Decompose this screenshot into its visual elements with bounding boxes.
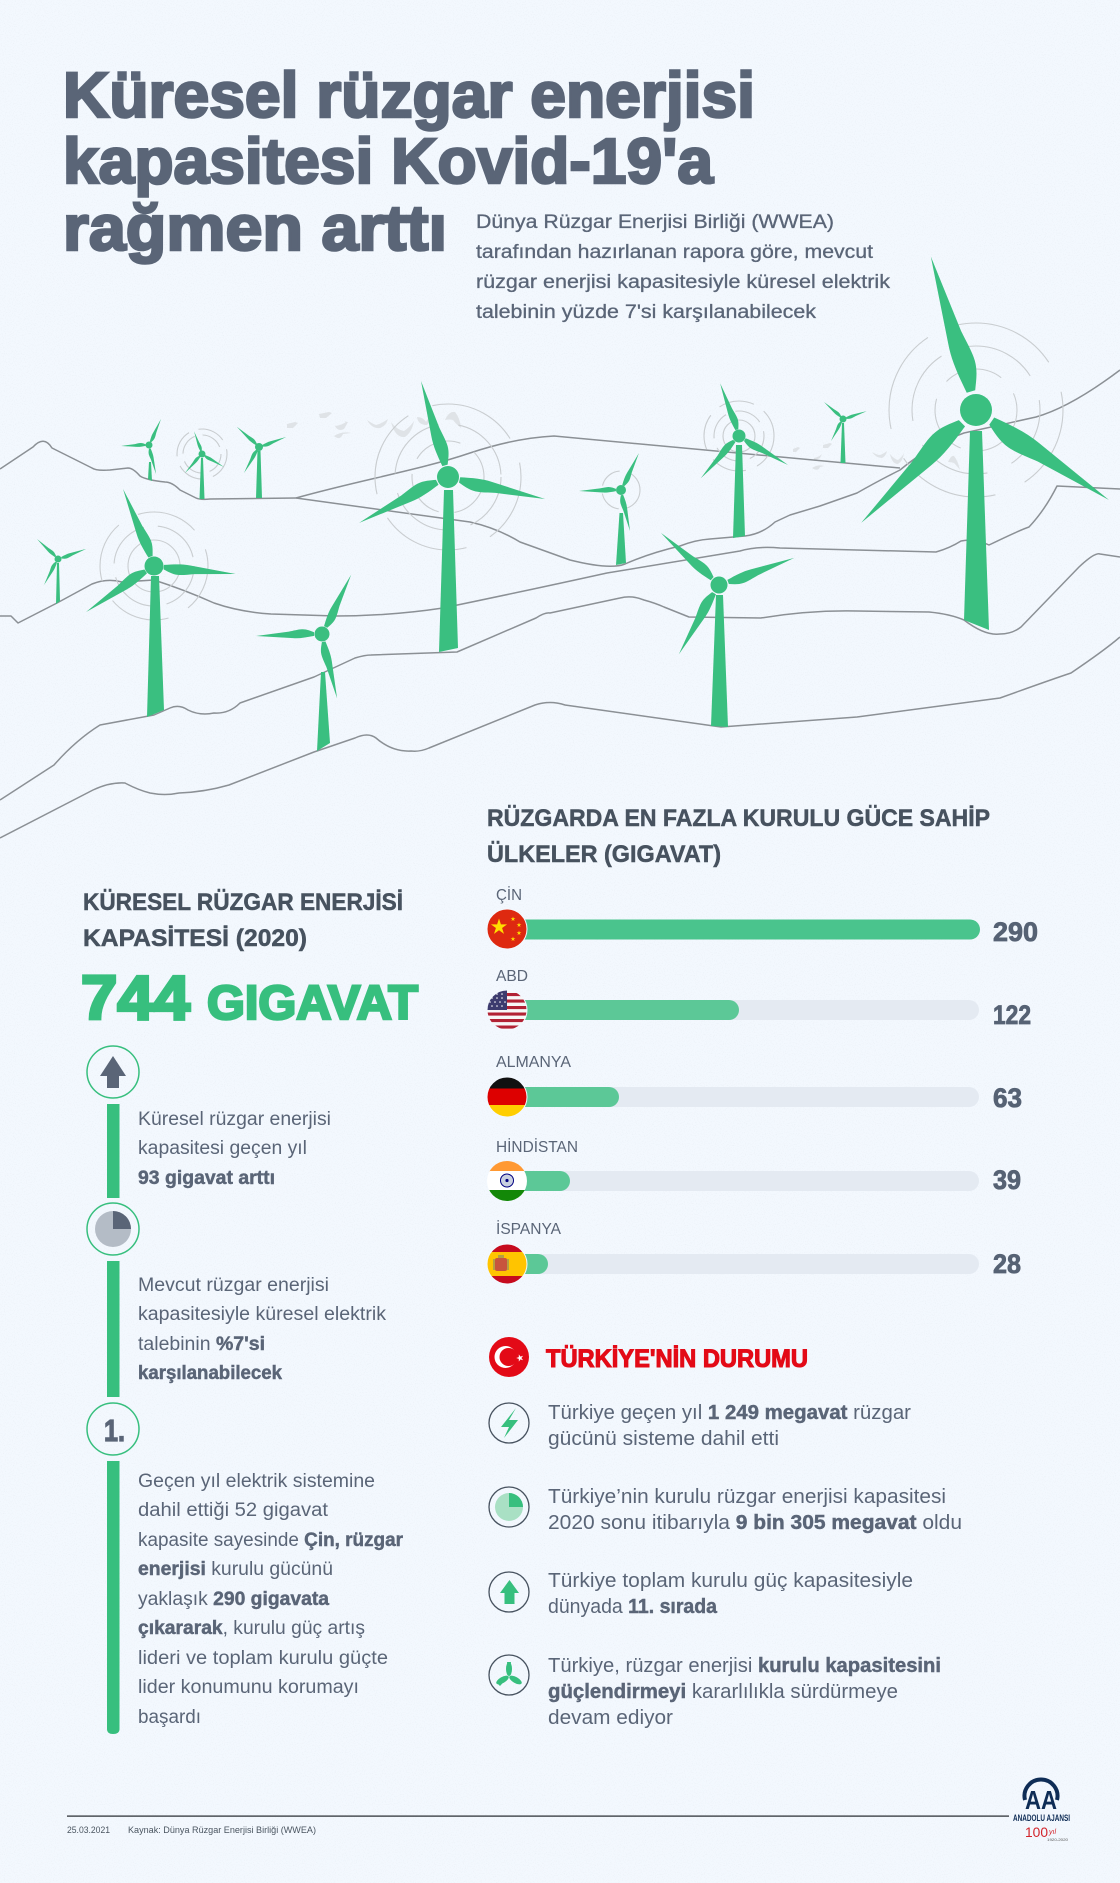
turbine far right small — [823, 400, 867, 463]
text: added capacity: Türkiye geçen yıl 1 249 megavat rüzgar — [548, 1402, 911, 1424]
text: China: çıkararak, kurulu güç artış — [138, 1618, 365, 1639]
text: China: Geçen yıl elektrik sistemine — [138, 1471, 375, 1492]
turbine left — [82, 487, 236, 717]
intro text: tarafından hazırlanan rapora göre, mevcut — [476, 241, 874, 263]
logo: Anadolu Ajansi: AA — [1025, 1785, 1057, 1815]
logo: Anadolu Ajansi: 100 — [1025, 1824, 1048, 1840]
text: China: kapasite sayesinde Çin, rüzgar — [138, 1530, 404, 1551]
turbine far small 1 — [236, 425, 287, 498]
text: growth: kapasitesi geçen yıl — [138, 1138, 307, 1159]
row: Spain: 28 — [993, 1249, 1021, 1279]
heading: top countries — [487, 805, 990, 868]
text: world ranking: dünyada 11. sırada — [548, 1596, 718, 1618]
row: India: 39 — [993, 1165, 1021, 1195]
text: added capacity: gücünü sisteme dahil etti — [548, 1428, 779, 1450]
panel: top countries chart — [487, 805, 1038, 1284]
row: Germany: ALMANYA — [496, 1054, 571, 1071]
illustration: wind farm landscape — [0, 253, 1120, 838]
row: Germany — [487, 1054, 1022, 1118]
text: China: başardı — [138, 1707, 201, 1728]
icon: lightning — [489, 1403, 529, 1443]
text: installed capacity: Türkiye’nin kurulu rüzgar enerjisi kapasitesi — [548, 1486, 946, 1508]
turbine large right — [852, 253, 1114, 630]
row: USA: 122 — [993, 1000, 1031, 1030]
icon: turbine rotor — [489, 1655, 529, 1695]
text: strengthening: devam ediyor — [548, 1707, 673, 1729]
text: demand share — [138, 1275, 387, 1384]
text: demand share: karşılanabilecek — [138, 1363, 282, 1384]
heading: Turkey: TÜRKİYE'NİN DURUMU — [546, 1344, 808, 1373]
row: China: ÇİN — [496, 885, 522, 904]
turbine lower centre — [658, 528, 796, 727]
icon: number one: 1. — [104, 1413, 125, 1448]
heading: global capacity: KÜRESEL RÜZGAR ENERJİSİ — [83, 889, 403, 916]
text: demand share: talebinin %7'si — [138, 1334, 265, 1355]
timeline bar 1 — [107, 1104, 120, 1198]
title: rağmen arttı — [63, 192, 447, 264]
icon: green pie — [489, 1487, 529, 1527]
text: China: lideri ve toplam kurulu güçte — [138, 1648, 388, 1669]
intro text: rüzgar enerjisi kapasitesiyle küresel elektrik — [476, 271, 890, 293]
text: demand share: kapasitesiyle küresel elektrik — [138, 1304, 387, 1325]
title: Küresel rüzgar enerjisi — [63, 59, 755, 131]
heading: top countries: ÜLKELER (GIGAVAT) — [487, 841, 721, 868]
heading: top countries: RÜZGARDA EN FAZLA KURULU GÜCE SAHİP — [487, 805, 990, 832]
text: strengthening: güçlendirmeyi kararlılıkla sürdürmeye — [548, 1681, 898, 1703]
footer date: 25.03.2021 — [67, 1825, 110, 1835]
turbine centre — [355, 379, 546, 652]
text: world ranking: Türkiye toplam kurulu güç kapasitesiyle — [548, 1570, 913, 1592]
logo: Anadolu Ajansi: ANADOLU AJANSI — [1013, 1813, 1070, 1823]
row: USA: ABD — [496, 968, 528, 985]
turbine upper centre — [697, 382, 790, 538]
timeline bar 3 — [107, 1461, 120, 1734]
text: growth: Küresel rüzgar enerjisi — [138, 1109, 331, 1130]
turbine far left — [36, 537, 87, 604]
turbine far small 3 — [121, 418, 163, 481]
icon: green arrow — [489, 1572, 529, 1612]
logo: Anadolu Ajansi — [1013, 1779, 1070, 1842]
title — [63, 59, 755, 264]
footer line — [67, 1816, 1009, 1817]
row: Spain: İSPANYA — [496, 1219, 561, 1238]
row: Spain — [487, 1219, 1021, 1284]
text: growth: 93 gigavat arttı — [138, 1168, 275, 1189]
text: China: dahil ettiği 52 gigavat — [138, 1500, 329, 1521]
logo: Anadolu Ajansi: yıl — [1048, 1829, 1056, 1836]
title: kapasitesi Kovid-19'a — [63, 125, 713, 197]
turbine middle small — [579, 452, 642, 565]
big number: 744 gigavat: 744 — [81, 964, 191, 1033]
text: strengthening: Türkiye, rüzgar enerjisi kurulu kapasitesini — [548, 1655, 941, 1677]
row: Germany: 63 — [993, 1083, 1022, 1113]
turbine lower left — [256, 573, 356, 751]
row: China: 290 — [993, 917, 1038, 947]
row: China — [487, 885, 1038, 949]
hills — [0, 370, 1120, 838]
panel: Turkey status — [489, 1337, 962, 1729]
row: India: HİNDİSTAN — [496, 1137, 578, 1156]
logo: Anadolu Ajansi: 1920-2020 — [1047, 1837, 1069, 1842]
panel: global capacity — [81, 889, 418, 1734]
text: demand share: Mevcut rüzgar enerjisi — [138, 1275, 329, 1296]
intro text — [476, 211, 890, 323]
big number: 744 gigavat — [81, 964, 418, 1033]
timeline bar 2 — [107, 1261, 120, 1397]
text: China: enerjisi kurulu gücünü — [138, 1559, 333, 1580]
icon: number one — [87, 1403, 139, 1455]
heading: global capacity: KAPASİTESİ (2020) — [83, 925, 307, 952]
text: installed capacity: 2020 sonu itibarıyla 9 bin 305 megavat oldu — [548, 1512, 962, 1534]
text: installed capacity — [548, 1486, 962, 1534]
icon: pie quarter — [87, 1203, 139, 1255]
icon: up arrow — [87, 1046, 139, 1098]
intro text: Dünya Rüzgar Enerjisi Birliği (WWEA) — [476, 211, 834, 233]
heading: global capacity — [83, 889, 403, 952]
text: China: yaklaşık 290 gigavata — [138, 1589, 329, 1610]
text: strengthening — [548, 1655, 941, 1729]
text: added capacity — [548, 1402, 911, 1450]
text: growth — [138, 1109, 331, 1189]
text: China — [138, 1471, 404, 1728]
text: China: lider konumunu korumayı — [138, 1677, 359, 1698]
row: India — [487, 1137, 1021, 1202]
footer source: Kaynak: Dünya Rüzgar Enerjisi Birliği (WWEA) — [128, 1825, 316, 1835]
big number: 744 gigavat: GIGAVAT — [207, 977, 418, 1030]
sound rings — [100, 323, 1063, 620]
row: USA — [487, 968, 1031, 1030]
birds — [287, 412, 960, 470]
text: world ranking — [548, 1570, 913, 1618]
intro text: talebinin yüzde 7'si karşılanabilecek — [476, 301, 816, 323]
turbine far small 2 — [183, 431, 225, 499]
icon: Turkish flag — [489, 1337, 529, 1377]
